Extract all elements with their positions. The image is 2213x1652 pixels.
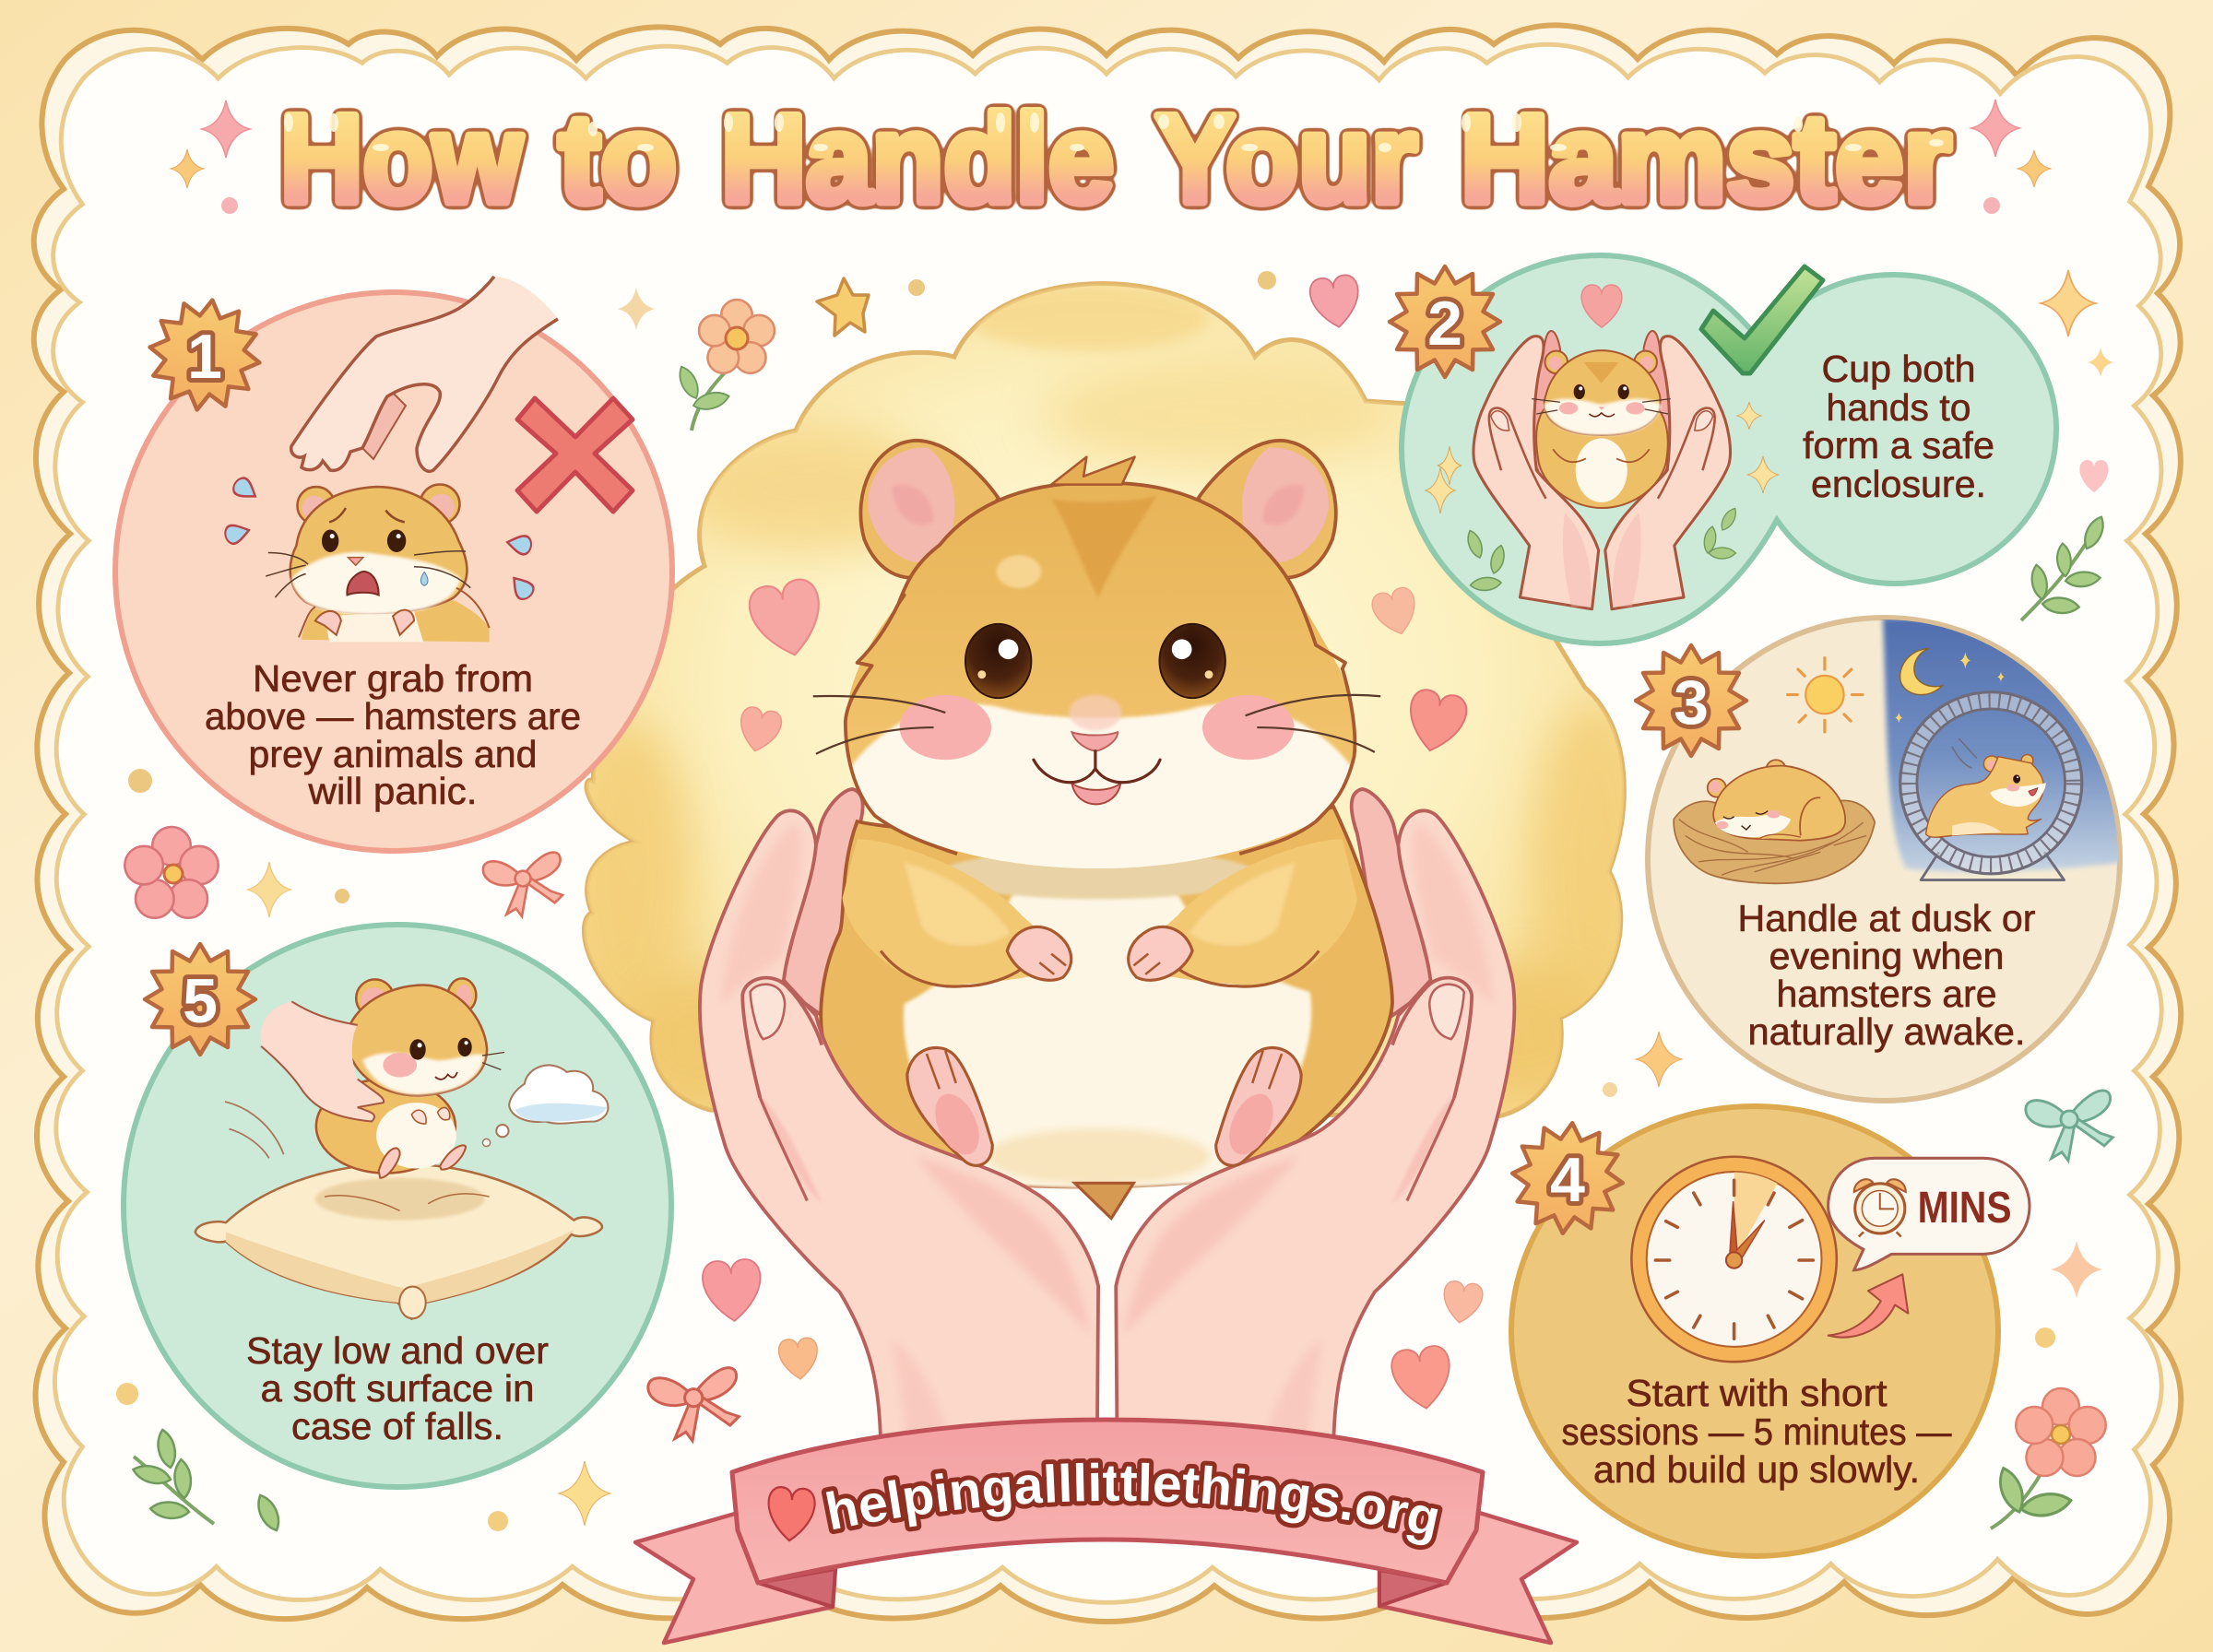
panel 1 text: will panic.	[307, 770, 478, 812]
panel 5 text	[246, 1329, 549, 1447]
number badge 5	[145, 944, 255, 1055]
panel 2 text: Cup both	[1822, 348, 1975, 390]
panel 1 text: prey animals and	[249, 733, 537, 775]
clock	[1631, 1157, 1837, 1362]
title	[280, 88, 1951, 229]
title: How	[280, 88, 523, 229]
number badge 1: 1	[187, 322, 222, 392]
panel 3 text: evening when	[1769, 935, 2005, 977]
panel 4 text: sessions — 5 minutes —	[1562, 1410, 1951, 1453]
title: Hamster	[1461, 88, 1951, 229]
number badge 3: 3	[1674, 667, 1709, 738]
sweat drops	[223, 475, 537, 602]
sleeping hamster in nest	[1674, 760, 1875, 883]
panel 3 text: naturally awake.	[1748, 1010, 2025, 1053]
panel 2 sparkles and leaves	[1426, 402, 1779, 592]
number badge 4	[1508, 1118, 1627, 1238]
panel 2: cup both hands	[1402, 255, 2056, 643]
right tail	[1379, 1512, 1577, 1643]
thought cloud	[482, 1065, 608, 1147]
cupped palms	[700, 810, 1514, 1445]
panel 3 text: hamsters are	[1776, 973, 1997, 1015]
website text: helpingalllittlethings.org	[822, 1458, 1442, 1551]
hamster body	[821, 807, 1392, 1219]
panel 5 text: Stay low and over	[246, 1329, 549, 1372]
mint panel heart	[1581, 285, 1622, 327]
right decorations: sparkles, heart, sprig	[2021, 270, 2113, 620]
central hamster in cupped hands	[700, 441, 1514, 1445]
night sky	[1883, 618, 2130, 872]
panel 4 text: Start with short	[1627, 1372, 1888, 1414]
panel 4 text: and build up slowly.	[1593, 1448, 1920, 1491]
hind feet	[907, 1048, 1301, 1165]
arms and paws	[843, 839, 1357, 986]
hamster held over pillow	[316, 978, 504, 1178]
number badge 4: 4	[1550, 1145, 1585, 1215]
number badge 2	[1390, 266, 1500, 377]
panel 1: never grab from above	[115, 277, 672, 851]
panel 2 text: hands to	[1826, 386, 1971, 429]
title: to	[559, 88, 677, 229]
hamster head	[839, 457, 1357, 886]
top decorations: flower, star, heart, dots	[618, 271, 1363, 431]
title: Your	[1155, 88, 1417, 229]
number badge 2: 2	[1427, 289, 1462, 359]
moon and stars	[1895, 649, 2005, 723]
speech bubble with alarm clock: MINS	[1918, 1183, 2012, 1233]
bottom-right decorations: sparkle, bow, flower	[1603, 1032, 2112, 1528]
panel 1 text: above — hamsters are	[205, 695, 581, 738]
exercise wheel with running hamster	[1900, 692, 2082, 880]
ribbon heart	[766, 1486, 816, 1542]
eyes	[965, 624, 1225, 698]
red cross	[517, 398, 633, 512]
lower hearts beside hands	[702, 1258, 1484, 1412]
holding hand	[261, 1001, 384, 1121]
back fingers	[781, 789, 1434, 1016]
panel 2 text	[1803, 348, 1994, 505]
whiskers	[813, 695, 1380, 754]
number badge 5: 5	[183, 966, 218, 1036]
left tail	[635, 1514, 835, 1643]
panel 1 text	[205, 657, 581, 812]
left decorations: dots, flower, sparkle, bow	[124, 769, 562, 918]
sun	[1788, 658, 1863, 732]
speech bubble with alarm clock	[1828, 1158, 2030, 1270]
panel 5 text: a soft surface in	[260, 1367, 535, 1410]
pillow	[195, 1163, 602, 1319]
panel 1 text: Never grab from	[253, 657, 533, 700]
ribbon band	[732, 1420, 1483, 1583]
heart decorations around hamster	[735, 576, 1470, 756]
panel 5: stay low over soft surface	[124, 925, 671, 1487]
ribbon banner	[633, 1418, 1579, 1645]
check mark	[1701, 266, 1823, 373]
hand reaching from above	[291, 277, 558, 471]
watercolor cloud backdrop	[562, 284, 1660, 1116]
title: Handle	[721, 88, 1114, 229]
frightened hamster	[266, 485, 490, 642]
number badge 3	[1636, 645, 1746, 756]
panel 3 text: Handle at dusk or	[1737, 897, 2036, 939]
bottom-left decorations: sprig, leaf, sparkle, dots	[116, 1368, 739, 1534]
panel 4 text	[1562, 1372, 1951, 1491]
panel 3: handle at dusk	[1648, 618, 2130, 1101]
ears	[860, 441, 1336, 578]
panel 3 text	[1737, 897, 2036, 1053]
panel 2 text: enclosure.	[1811, 463, 1986, 505]
hands cupping mini hamster	[1473, 331, 1730, 609]
nose, mouth, tongue	[1034, 732, 1160, 804]
panel 5 text: case of falls.	[291, 1405, 503, 1447]
title sparkles	[171, 100, 2051, 214]
panel 2 text: form a safe	[1803, 424, 1994, 466]
panel 4: short sessions	[1511, 1106, 2030, 1556]
motion lines	[225, 1102, 284, 1158]
number badge 1	[142, 292, 267, 418]
arrow	[1828, 1274, 1908, 1338]
